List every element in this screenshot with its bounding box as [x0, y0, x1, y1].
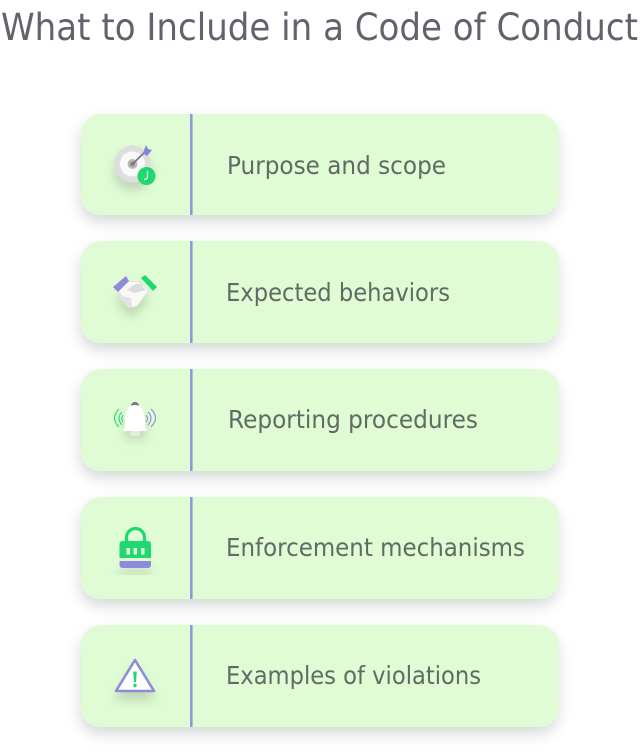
icon: handshake — [113, 275, 157, 308]
panel: enforcement mechanisms — [81, 497, 559, 599]
icon: padlock — [120, 528, 151, 568]
panel: expected behaviors — [81, 241, 559, 343]
label: reporting procedures: Reporting procedures — [228, 405, 478, 434]
panel: purpose and scope — [81, 114, 559, 215]
icon: warning triangle — [116, 660, 154, 691]
panel: examples of violations — [81, 625, 559, 727]
panel: reporting procedures — [81, 369, 559, 471]
icon: alarm bell — [114, 402, 156, 436]
icon: target with dart and clock — [114, 145, 156, 185]
label: expected behaviors: Expected behaviors — [226, 278, 450, 307]
label: examples of violations: Examples of violations — [226, 661, 481, 690]
label: enforcement mechanisms: Enforcement mechanisms — [226, 533, 525, 562]
label: purpose and scope: Purpose and scope — [227, 151, 446, 180]
